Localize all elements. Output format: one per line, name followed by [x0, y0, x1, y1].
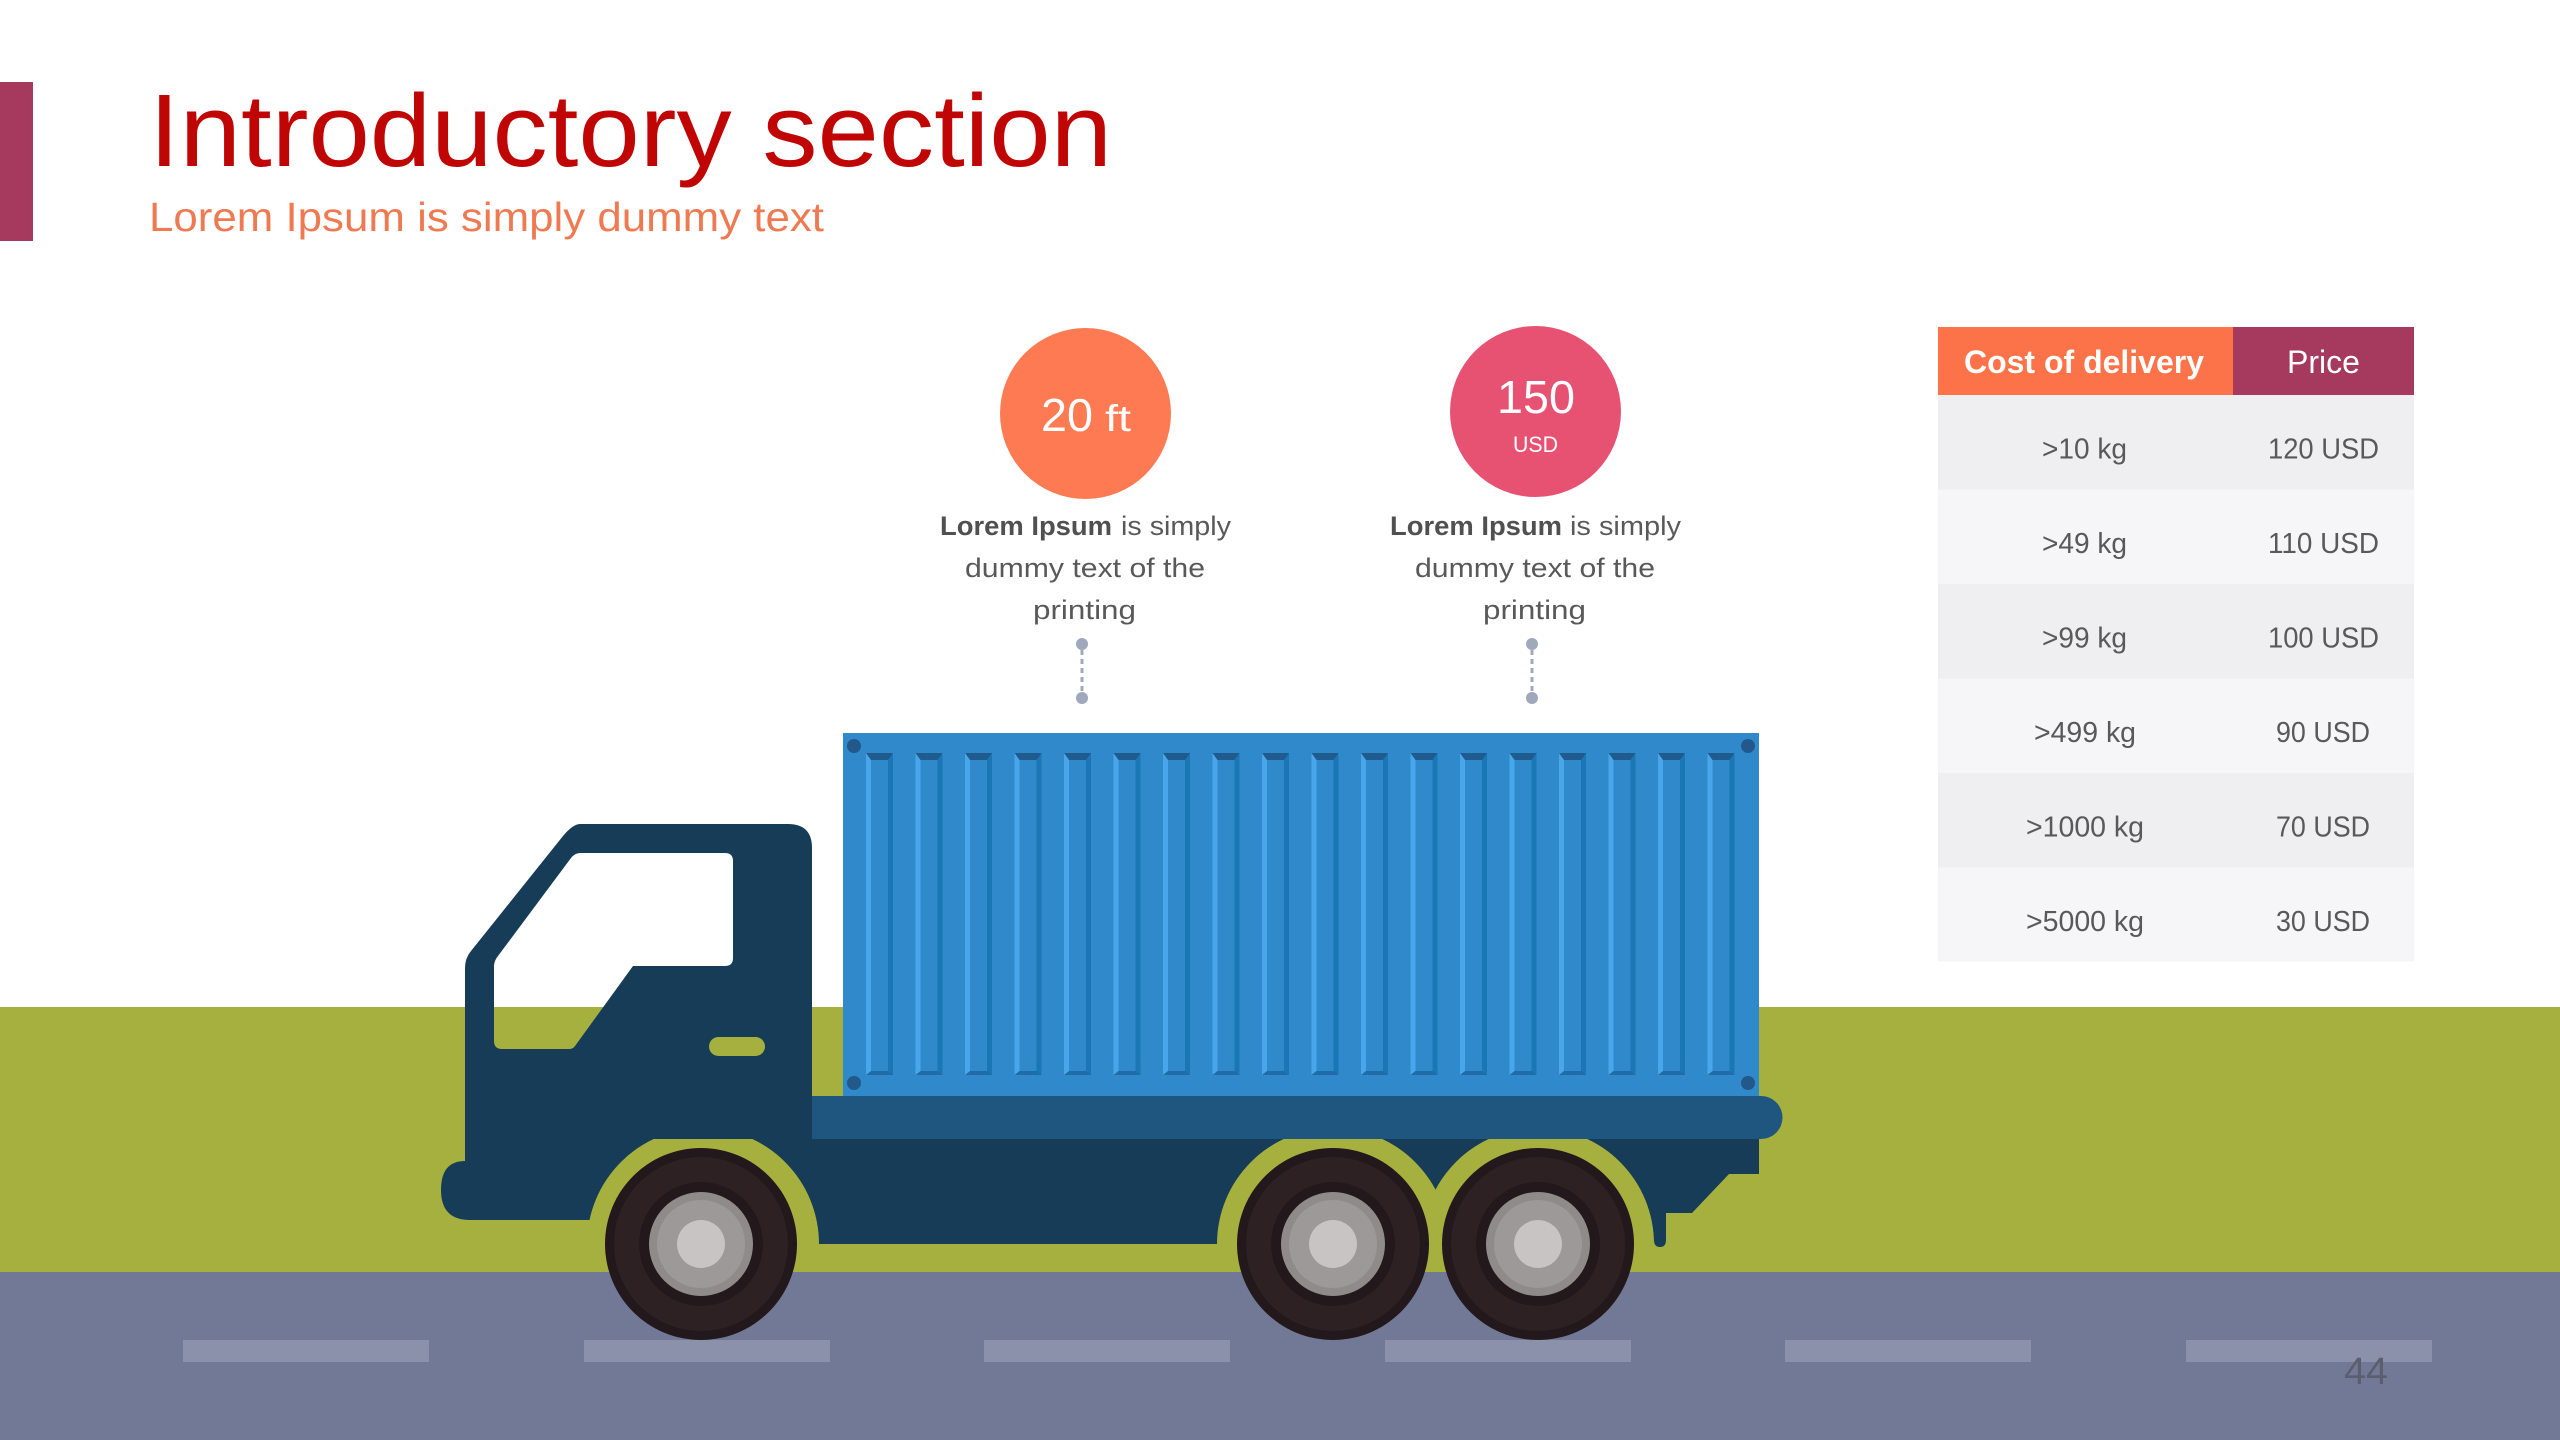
table rows: 100 USD: [2268, 622, 2379, 654]
truck cab and chassis: [441, 824, 1759, 1247]
description: right: is simply: [1570, 511, 1682, 541]
container rivets: [847, 739, 1755, 1090]
value: 20 ft: 20: [1041, 389, 1093, 441]
table header: Cost of delivery: [1964, 344, 2204, 380]
flatbed platform: [812, 1096, 1782, 1139]
table rows: >1000 kg: [2026, 812, 2144, 844]
table rows: >499 kg: [2034, 717, 2136, 749]
circle: 150 USD: [1450, 326, 1621, 497]
table rows: 30 USD: [2276, 906, 2370, 938]
table rows: [1938, 395, 2414, 962]
callout: 20 ft: [940, 328, 1232, 704]
value: 150: 150: [1497, 371, 1575, 423]
page number: 44: [2344, 1351, 2388, 1393]
unit: ft: ft: [1105, 398, 1132, 439]
road: [0, 1272, 2560, 1440]
truck illustration: [441, 733, 1782, 1360]
table header: Price: [2287, 344, 2360, 380]
wheel arches: [590, 1139, 1654, 1244]
table rows: 120 USD: [2268, 434, 2379, 466]
title: Introductory section: [149, 73, 1112, 188]
front wheel: [605, 1148, 797, 1340]
unit: USD: USD: [1513, 432, 1558, 457]
description: right: printing: [1483, 595, 1586, 625]
description: left: is simply: [1121, 511, 1232, 541]
dotted connector: left: [1076, 638, 1088, 704]
description: left: Lorem Ipsum: [940, 511, 1112, 541]
middle wheel: [1237, 1148, 1429, 1340]
accent bar: [0, 82, 33, 241]
table rows: 90 USD: [2276, 717, 2370, 749]
table: cost of delivery: [1938, 327, 2414, 962]
table rows: >99 kg: [2042, 622, 2127, 654]
subtitle: Lorem Ipsum is simply dummy text: [149, 194, 825, 240]
description: left: [940, 511, 1232, 625]
table rows: >5000 kg: [2026, 906, 2144, 938]
table rows: >49 kg: [2042, 528, 2127, 560]
description: left: printing: [1033, 595, 1136, 625]
circle: 20 ft: [1000, 328, 1171, 499]
table rows: 70 USD: [2276, 812, 2370, 844]
description: right: dummy text of the: [1415, 553, 1655, 583]
ground: grass band: [0, 1007, 2560, 1272]
description: left: dummy text of the: [965, 553, 1205, 583]
callout: 150 USD: [1390, 326, 1682, 704]
rear wheel: [1442, 1148, 1634, 1340]
dotted connector: right: [1526, 638, 1538, 704]
table rows: >10 kg: [2042, 434, 2127, 466]
shipping container: [843, 733, 1759, 1096]
description: right: [1390, 511, 1682, 625]
container ribs: [866, 753, 1734, 1075]
description: right: Lorem Ipsum: [1390, 511, 1562, 541]
door handle: [709, 1037, 765, 1056]
table rows: 110 USD: [2268, 528, 2379, 560]
table header: [1938, 327, 2414, 395]
